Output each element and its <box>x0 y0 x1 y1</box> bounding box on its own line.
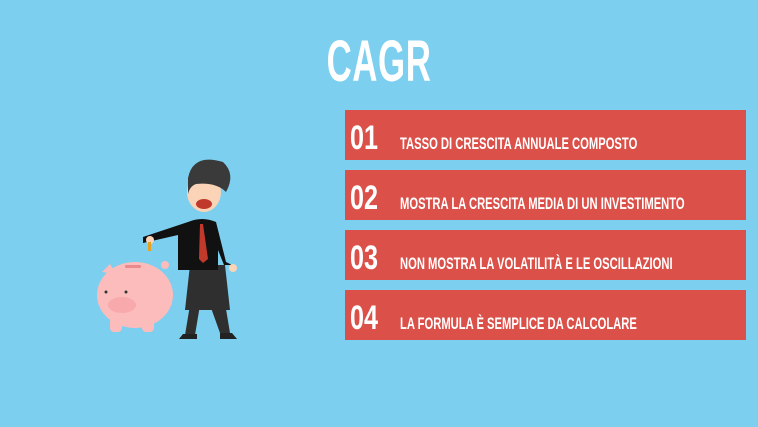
bar 02 <box>345 170 746 220</box>
bar 04: 04 <box>350 299 378 337</box>
bar 03 <box>345 230 746 280</box>
illustration: man and piggy bank <box>97 160 237 339</box>
bar 03: NON MOSTRA LA VOLATILITÀ E LE OSCILLAZIONI <box>400 254 673 273</box>
piggy bank <box>97 261 173 332</box>
bar 04: LA FORMULA È SEMPLICE DA CALCOLARE <box>400 314 637 333</box>
bar 02: 02 <box>350 179 378 217</box>
bar 01: TASSO DI CRESCITA ANNUALE COMPOSTO <box>400 134 637 153</box>
bar 01: 01 <box>350 119 378 157</box>
bar 02: MOSTRA LA CRESCITA MEDIA DI UN INVESTIMENTO <box>400 194 685 213</box>
title: CAGR <box>327 29 431 94</box>
bar 01 <box>345 110 746 160</box>
man <box>143 160 237 339</box>
bar 04 <box>345 290 746 340</box>
bar 03: 03 <box>350 239 378 277</box>
